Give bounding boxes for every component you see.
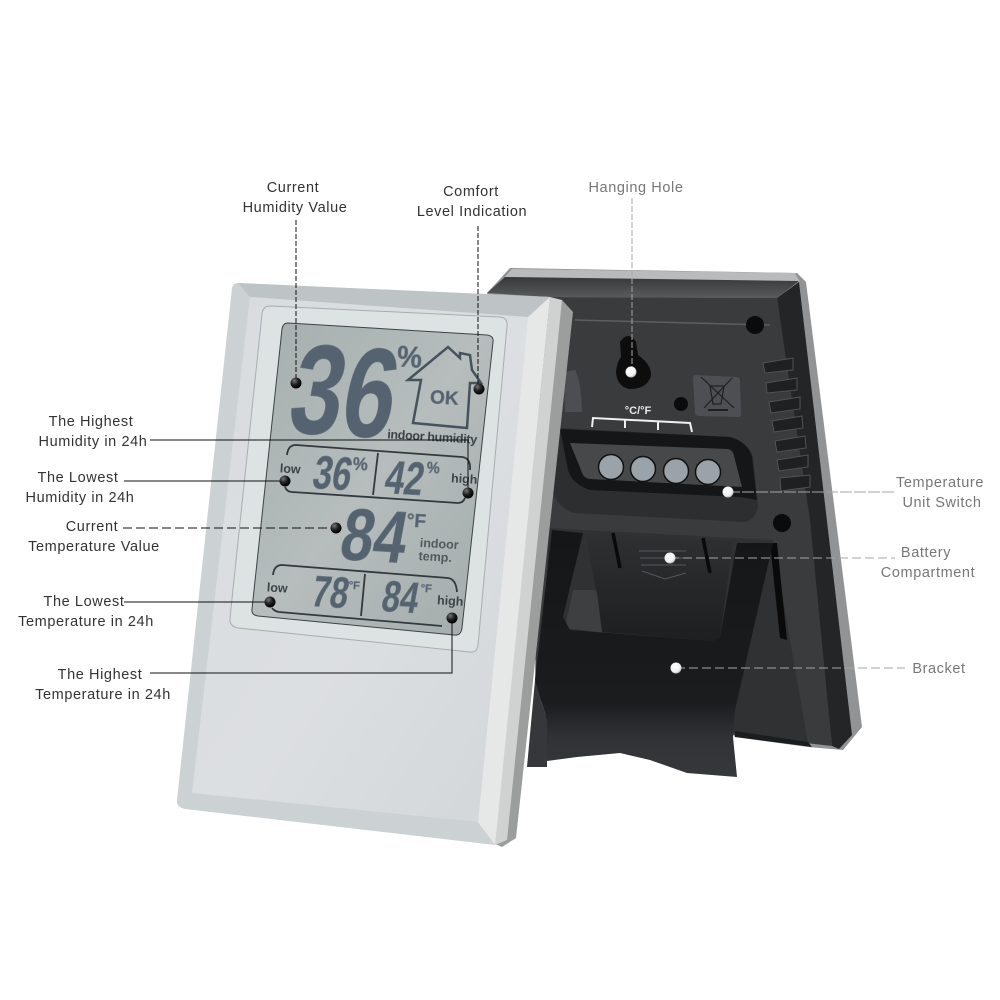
label: highest humidity: Humidity in 24h: [39, 434, 147, 450]
comfort house icon: OK: [429, 387, 459, 410]
low temp label: low: [266, 580, 288, 596]
side wall light: [495, 297, 562, 845]
casing bevels: [177, 283, 550, 845]
vent slots: [613, 533, 710, 573]
label: comfort level: Level Indication: [417, 204, 527, 220]
mounting holes: [674, 316, 791, 532]
casing face: [192, 297, 528, 822]
left foot: [527, 680, 547, 767]
lowest humidity digits: 36: [309, 445, 357, 500]
label: highest temperature: Temperature in 24h: [35, 687, 171, 703]
label: lowest humidity: The Lowest: [38, 470, 118, 486]
indoor temp text: indoor: [419, 536, 459, 552]
battery ridges: [639, 551, 686, 579]
humidity bracket: [285, 445, 470, 503]
lowest temp unit: °F: [348, 580, 360, 592]
highest humidity digits: 42: [381, 450, 429, 505]
high temp label: high: [437, 593, 464, 609]
battery cover: [585, 533, 733, 641]
LCD: [252, 323, 493, 635]
side tab: [564, 370, 582, 412]
black marker dots: [264, 378, 484, 624]
humidity digits: 36: [280, 318, 410, 466]
label: comfort level: Comfort: [443, 184, 499, 200]
bracket: [535, 530, 773, 777]
label: current temperature: Temperature Value: [28, 539, 160, 555]
label: battery compartment: Battery: [901, 545, 951, 561]
label: highest humidity: The Highest: [49, 414, 133, 430]
current temp digits: 84: [335, 493, 415, 579]
back device: [487, 268, 862, 777]
white marker dots: [626, 366, 734, 674]
bracket opening shadow: [545, 528, 808, 743]
temp text: temp.: [418, 549, 452, 565]
lowest humidity percent: %: [352, 454, 368, 474]
front device: [177, 283, 573, 847]
unit label: °C/°F: [625, 405, 652, 417]
label: temperature unit switch: Unit Switch: [902, 495, 982, 511]
percent sign: %: [396, 340, 423, 375]
highest humidity percent: %: [426, 460, 440, 477]
vent ribs: [763, 358, 810, 491]
highest temp unit: °F: [420, 583, 432, 595]
label: current humidity: Humidity Value: [243, 200, 347, 216]
label: battery compartment: Compartment: [881, 565, 975, 581]
lowest temp digits: 78: [308, 567, 353, 618]
label: lowest temperature: The Lowest: [44, 594, 124, 610]
grey outer strip: [487, 268, 862, 750]
rear panel: [535, 297, 832, 746]
recycling symbol: [693, 375, 741, 417]
label: highest temperature: The Highest: [58, 667, 142, 683]
leader lines: back: [632, 198, 905, 668]
label: current humidity: Current: [267, 180, 319, 196]
leader lines: front: [123, 220, 478, 673]
label: bracket: Bracket: [912, 661, 966, 677]
lower panel band: [735, 731, 812, 747]
label: lowest temperature: Temperature in 24h: [18, 614, 154, 630]
hanging hole: [616, 336, 651, 389]
label: lowest humidity: Humidity in 24h: [26, 490, 134, 506]
fahrenheit: °F: [406, 510, 427, 533]
low humidity label: low: [279, 461, 301, 477]
bracket markings: [592, 418, 692, 432]
switches: [598, 454, 720, 484]
highest temp digits: 84: [378, 572, 423, 623]
comfort house icon: [408, 347, 481, 428]
label: hanging hole: Hanging Hole: [588, 180, 684, 196]
switch recess: [553, 428, 758, 522]
indoor humidity text: indoor humidity: [387, 427, 478, 447]
bezel: [230, 306, 507, 652]
high humidity label: high: [451, 471, 478, 487]
label: current temperature: Current: [66, 519, 118, 535]
battery side gap: [565, 590, 605, 633]
label: temperature unit switch: Temperature: [896, 475, 984, 491]
temperature bracket: [272, 565, 457, 626]
side wall grey: [495, 300, 573, 847]
